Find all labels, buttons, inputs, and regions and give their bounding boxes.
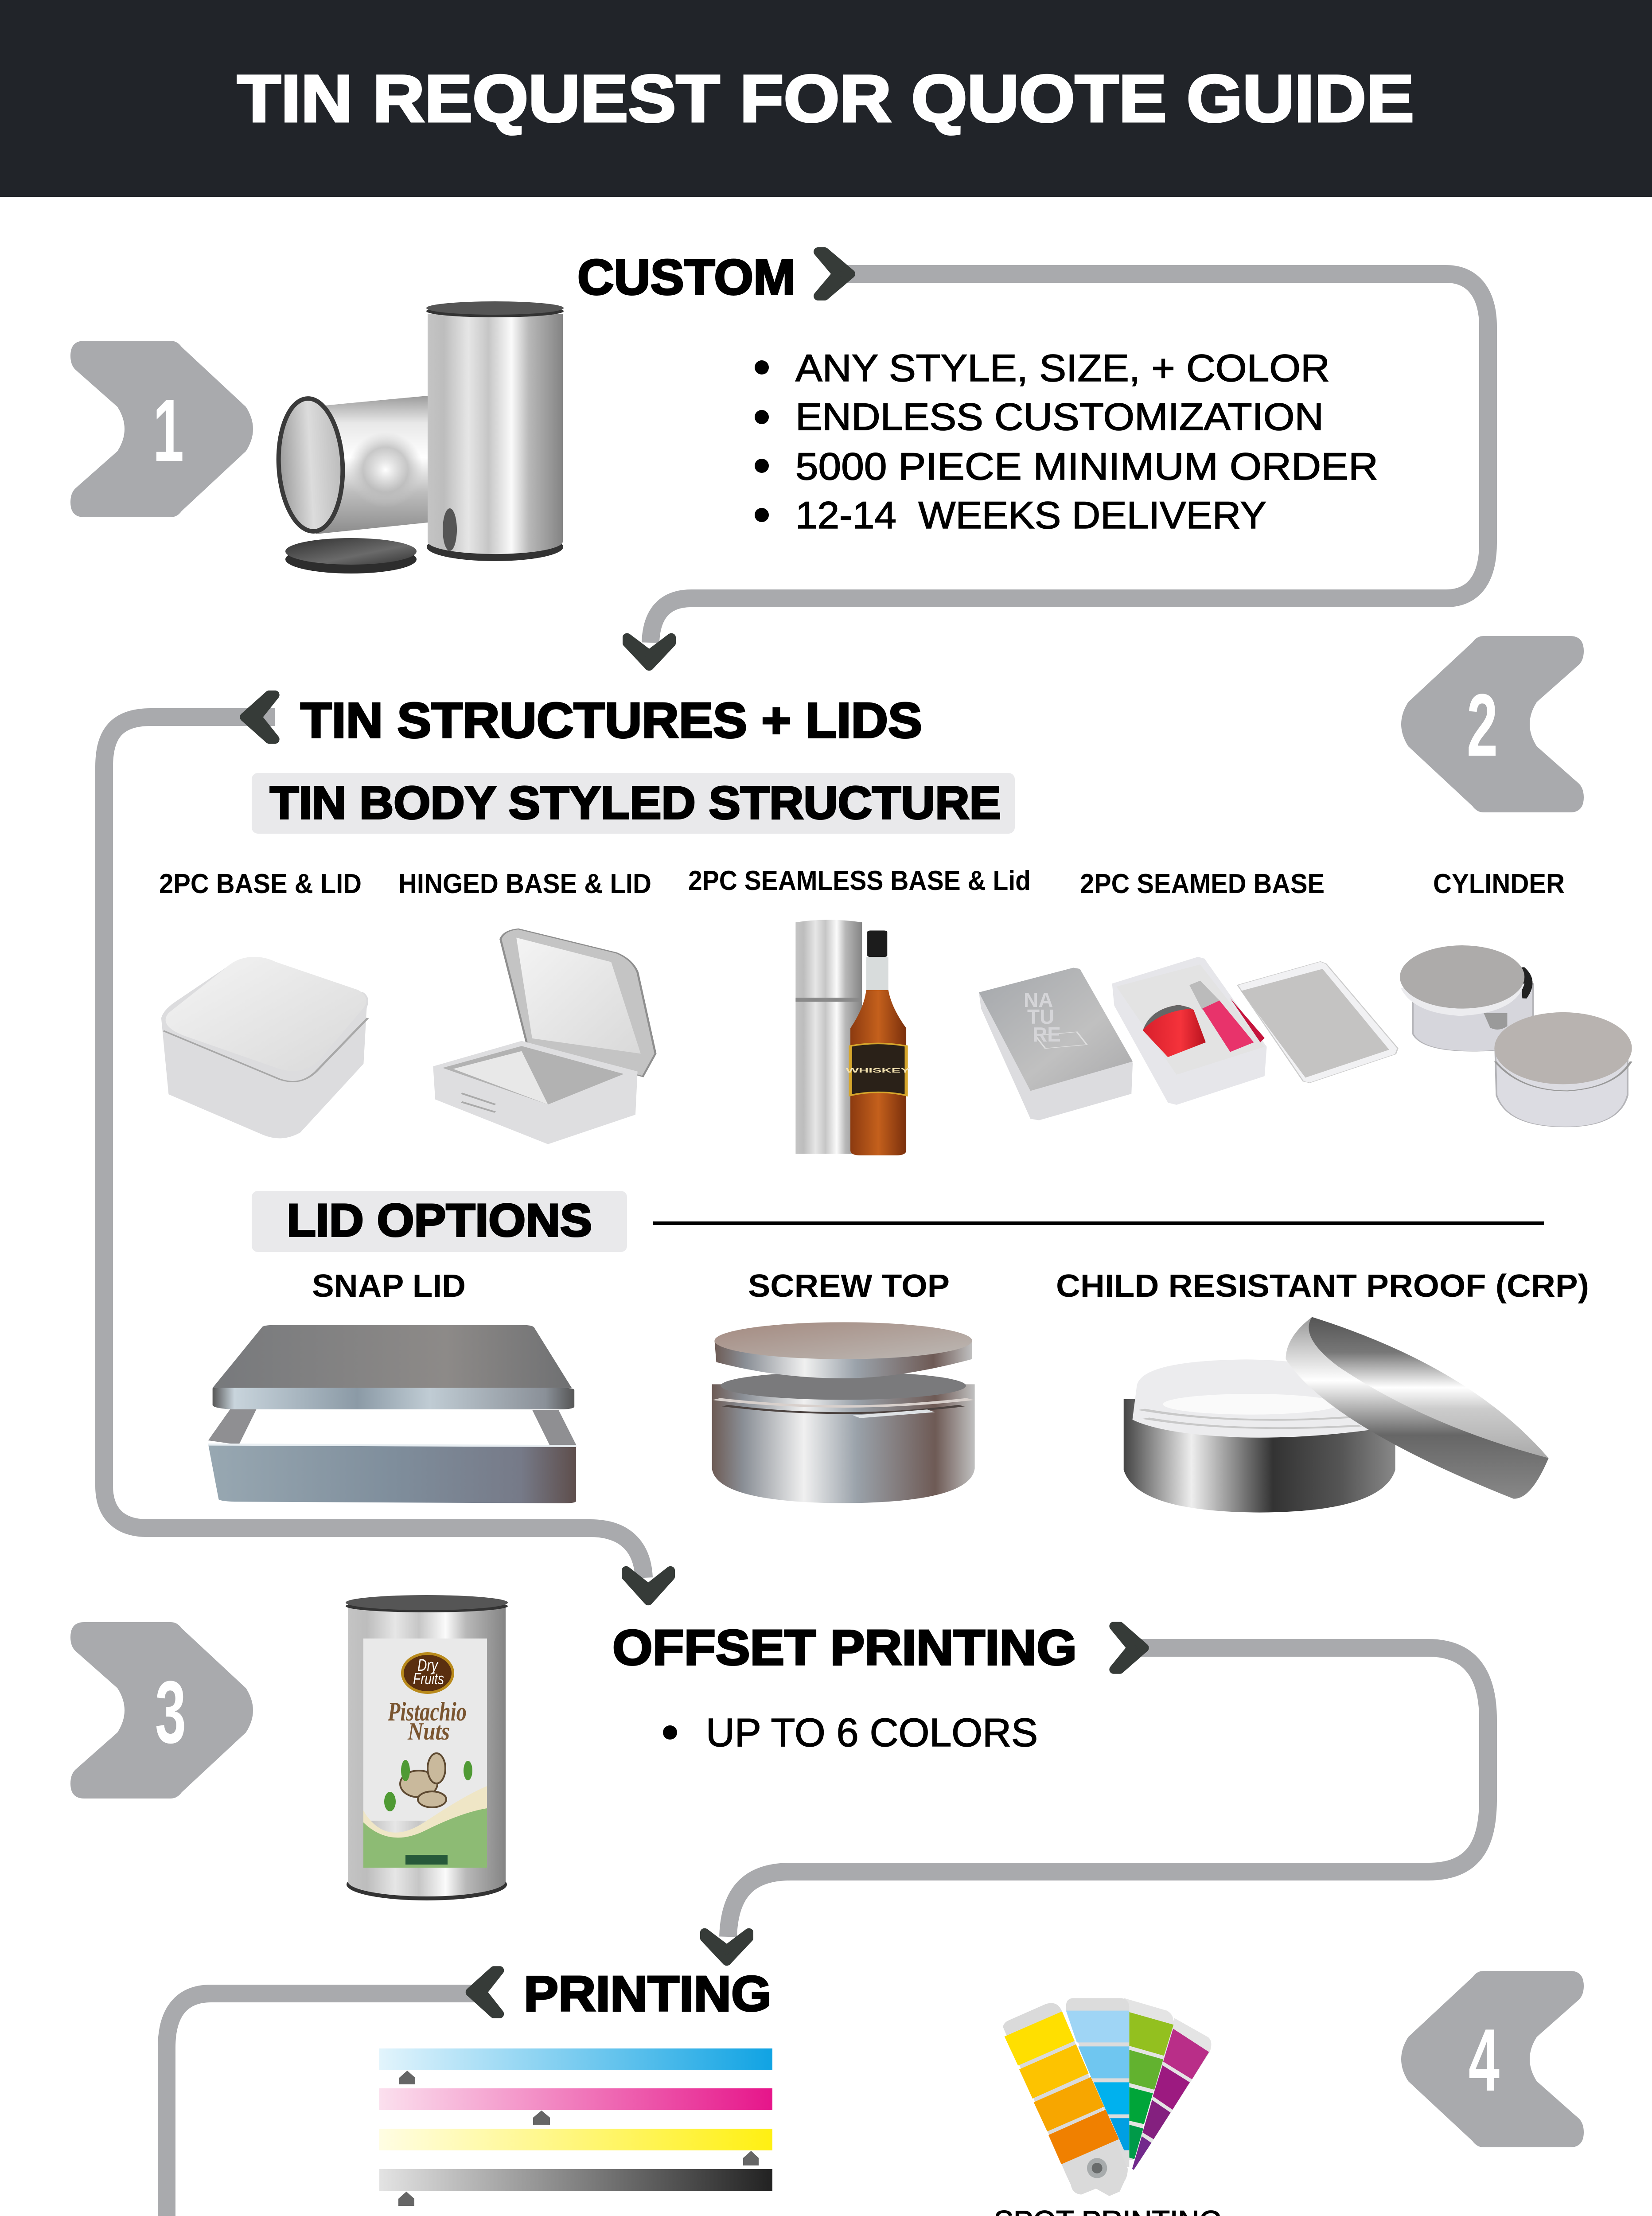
black marker — [398, 2192, 414, 2206]
black bar — [379, 2169, 772, 2191]
image: pistachio nuts tin: Fruits — [413, 1670, 444, 1688]
title: TIN REQUEST FOR QUOTE GUIDE — [237, 61, 1414, 136]
cmyk sliders — [379, 2048, 772, 2216]
image: pistachio nuts tin: Nuts — [407, 1718, 450, 1745]
step badge 3 — [70, 1622, 253, 1799]
image: child resistant proof tin — [1124, 1317, 1549, 1513]
heading: printing: PRINTING — [524, 1966, 771, 2021]
lid labels — [312, 1268, 1589, 1304]
flow arrow 4 to 5 — [167, 1970, 633, 2216]
structure labels: CYLINDER — [1433, 869, 1565, 899]
bullet list: custom: 5000 PIECE MINIMUM ORDER — [795, 445, 1378, 488]
label emboss on seamed lid: RE — [1032, 1023, 1061, 1046]
label emboss on seamed lid: TU — [1027, 1005, 1054, 1028]
magenta bar — [379, 2088, 772, 2110]
bullet list: custom: ANY STYLE, SIZE, + COLOR — [795, 347, 1330, 390]
header band — [0, 0, 1652, 197]
step badge 4: 4 — [1469, 2011, 1500, 2110]
structure labels: 2PC SEAMED BASE — [1080, 869, 1325, 899]
icon: pantone colour fan — [1003, 1998, 1211, 2196]
bullet list: custom: 12-14 WEEKS DELIVERY — [795, 494, 1266, 537]
yellow marker — [743, 2151, 759, 2165]
label emboss on seamed lid — [1024, 988, 1061, 1046]
flow arrow 1 to 2 — [627, 252, 1488, 667]
lid labels: CHILD RESISTANT PROOF (CRP) — [1056, 1268, 1589, 1304]
cyan marker — [399, 2071, 415, 2084]
step badge 2: 2 — [1467, 676, 1498, 775]
image: cylinder tins — [1400, 945, 1632, 1127]
flow arrow 2 to 3 — [104, 695, 670, 1601]
step badge 1: 1 — [153, 381, 184, 480]
step badge 2 — [1401, 636, 1584, 812]
bullet list: custom — [755, 347, 1378, 537]
image: hinged base and lid tin — [433, 929, 655, 1144]
yellow bar — [379, 2129, 772, 2150]
image: pistachio nuts tin: Pistachio — [387, 1697, 467, 1726]
subheading: lid options — [252, 1191, 627, 1252]
image: seamless cylinder and whiskey bottle — [795, 920, 910, 1155]
step badge 4 — [1401, 1971, 1584, 2147]
lid labels: SNAP LID — [312, 1268, 466, 1304]
image: custom tins — [275, 301, 564, 574]
structure labels — [159, 866, 1565, 899]
step badge 3: 3 — [155, 1663, 186, 1762]
image: snap lid tin — [208, 1325, 576, 1503]
label emboss on seamed lid: NA — [1024, 988, 1053, 1011]
image: seamed base tins — [979, 957, 1398, 1120]
structure labels: 2PC SEAMLESS BASE & Lid — [688, 866, 1031, 896]
subheading: lid options: LID OPTIONS — [287, 1195, 592, 1246]
flow arrow 3 to 4 — [705, 1626, 1488, 1962]
heading: custom: CUSTOM — [577, 250, 795, 305]
heading: offset printing: OFFSET PRINTING — [612, 1620, 1077, 1675]
lid labels: SCREW TOP — [748, 1268, 950, 1304]
image: seamless cylinder and whiskey bottle: WHISKEY — [846, 1067, 910, 1074]
image: pistachio nuts tin — [346, 1595, 508, 1900]
image: screw top tin — [712, 1322, 975, 1503]
bullet list: custom: ENDLESS CUSTOMIZATION — [795, 396, 1324, 438]
bullet: up to 6 colors: UP TO 6 COLORS — [706, 1711, 1038, 1755]
subheading: tin body styled structure: TIN BODY STYLED STRUCTURE — [270, 777, 1001, 829]
structure labels: 2PC BASE & LID — [159, 869, 362, 899]
image: pistachio nuts tin: Dry — [417, 1656, 439, 1675]
cyan bar — [379, 2048, 772, 2070]
magenta marker — [533, 2111, 550, 2125]
heading: tin structures + lids: TIN STRUCTURES + LIDS — [300, 693, 922, 748]
step badge 1 — [70, 341, 253, 517]
structure labels: HINGED BASE & LID — [398, 869, 651, 899]
image: 2pc base and lid tin — [161, 957, 368, 1138]
